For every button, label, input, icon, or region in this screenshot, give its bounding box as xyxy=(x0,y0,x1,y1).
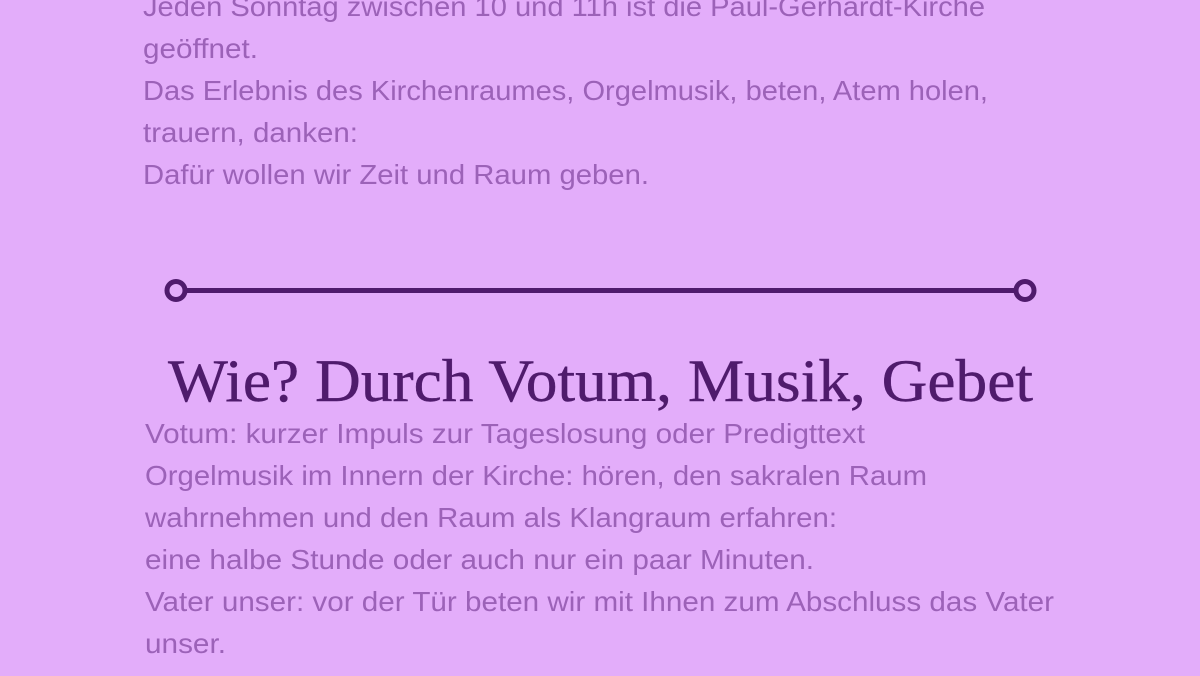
text block: description of the service xyxy=(144,418,1054,659)
text block: opening hours: Das Erlebnis des Kirchenraumes, Orgelmusik, beten, Atem holen, xyxy=(143,75,988,106)
text block: description of the service: unser. xyxy=(145,628,226,659)
text block: opening hours: Dafür wollen wir Zeit und Raum geben. xyxy=(143,159,649,190)
text block: description of the service: wahrnehmen und den Raum als Klangraum erfahren: xyxy=(144,502,837,533)
text block: opening hours: geöffnet. xyxy=(143,33,258,64)
text block: description of the service: Vater unser: vor der Tür beten wir mit Ihnen zum Abschluss das Vater xyxy=(145,586,1054,617)
text block: description of the service: Orgelmusik im Innern der Kirche: hören, den sakralen Raum xyxy=(145,460,927,491)
divider: line with ring ends xyxy=(167,282,1034,300)
text block: description of the service: eine halbe Stunde oder auch nur ein paar Minuten. xyxy=(145,544,814,575)
text block: description of the service: Votum: kurzer Impuls zur Tageslosung oder Predigttext xyxy=(145,418,865,449)
heading: Wie? Durch Votum, Musik, Gebet xyxy=(168,348,1033,414)
text block: opening hours: trauern, danken: xyxy=(143,117,358,148)
text block: opening hours xyxy=(143,0,988,190)
